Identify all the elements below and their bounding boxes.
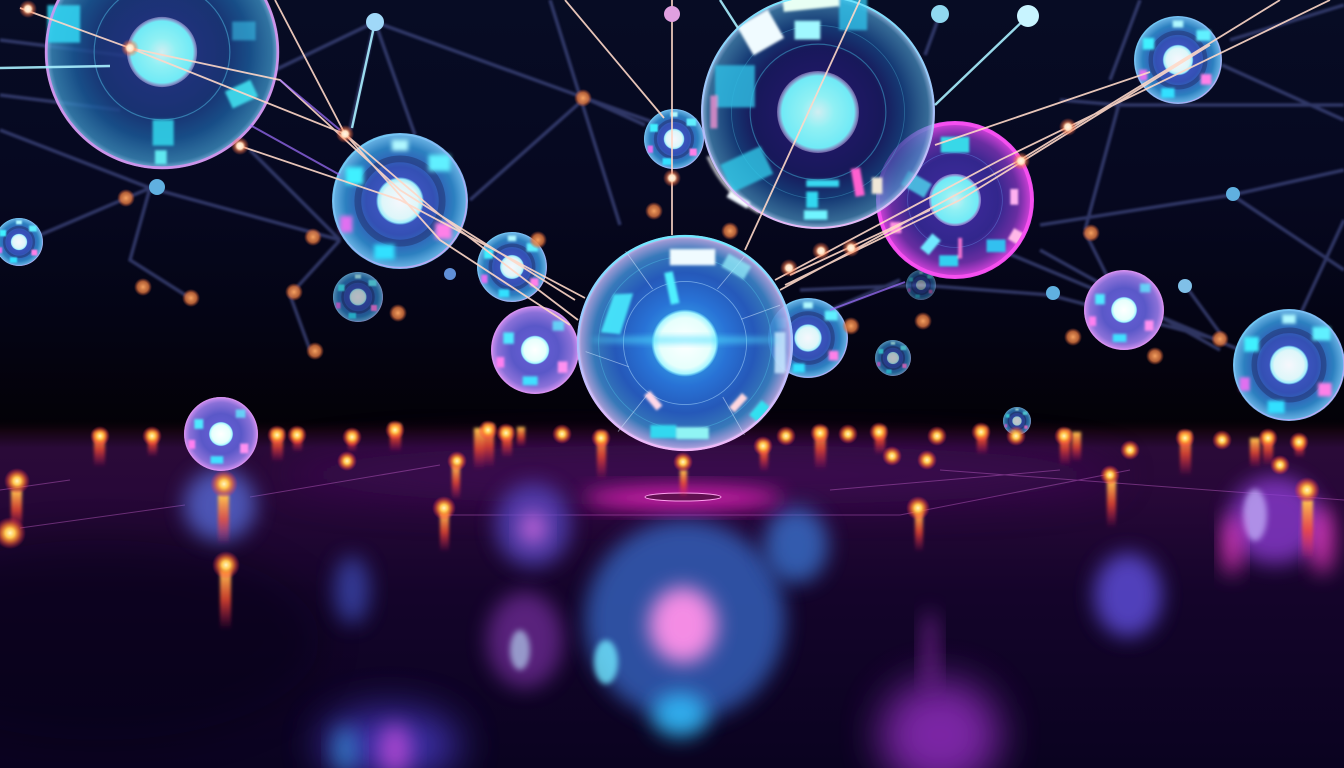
sphere: top left large <box>45 0 279 169</box>
floor reflections <box>184 469 1334 768</box>
sphere: top centre large <box>701 0 935 229</box>
sphere: centre main <box>577 235 793 451</box>
network nodes: orange and blue <box>19 0 1240 365</box>
floor: purple horizon glow <box>280 445 1120 505</box>
sphere: right magenta rim <box>876 121 1034 279</box>
horizon lights <box>0 420 1320 630</box>
sphere: left medium <box>332 133 468 269</box>
sphere: purple left of centre <box>491 306 579 394</box>
network lines: bright beams <box>20 0 1330 325</box>
network lines: dim background <box>0 0 1344 350</box>
sphere: far right <box>1233 309 1344 421</box>
background blurred spheres <box>0 16 1222 471</box>
floor <box>0 420 1344 768</box>
floor grid lines <box>0 465 1344 528</box>
magenta glow under centre sphere <box>583 487 783 509</box>
floor: side darkening <box>0 540 320 740</box>
